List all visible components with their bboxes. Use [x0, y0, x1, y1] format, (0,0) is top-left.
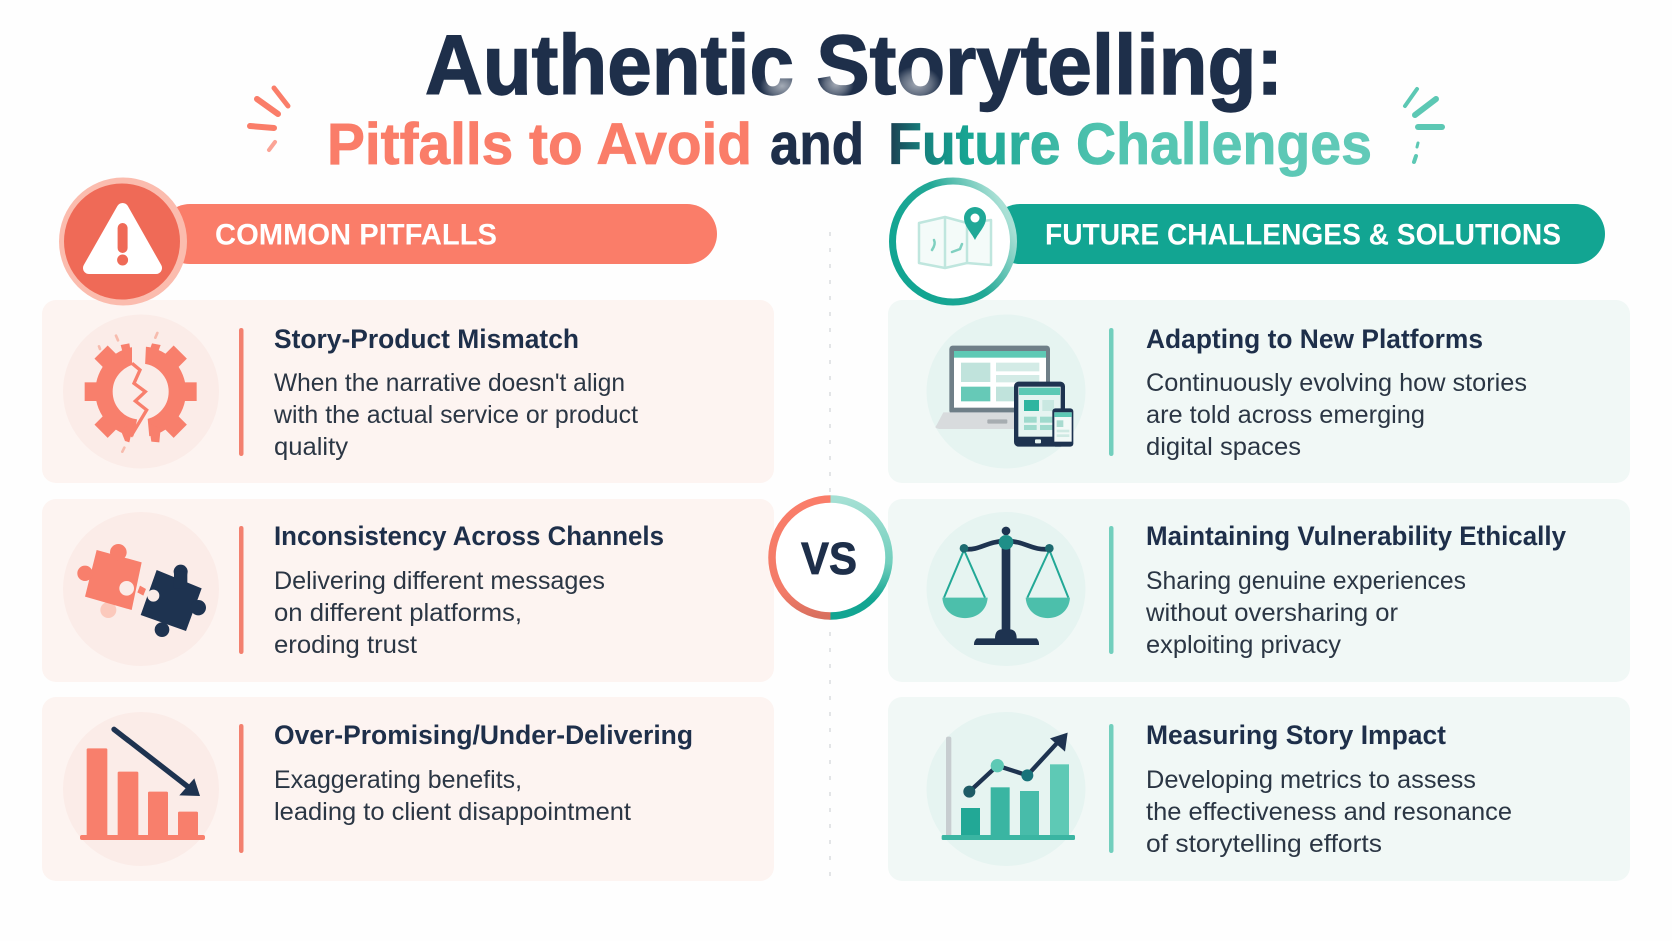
panel: inconsistency across channels: on different platforms, [274, 599, 522, 627]
panel: measuring story impact [888, 697, 1630, 881]
panel: maintaining vulnerability ethically: exploiting privacy [1146, 631, 1342, 659]
icon: declining bar chart [80, 729, 205, 840]
icon: teal sparks [1405, 89, 1442, 162]
icon: coral sparks [250, 88, 288, 150]
subtitle [327, 112, 1372, 177]
icon: map with pin [892, 181, 1014, 302]
banner: future challenges and solutions: FUTURE CHALLENGES & SOLUTIONS [1045, 218, 1561, 252]
title: Authentic Storytelling: [425, 18, 1283, 112]
panel: over-promising under-delivering: leading to client disappointment [274, 798, 631, 826]
icon: warning triangle [59, 178, 187, 306]
panel: inconsistency across channels [42, 499, 774, 682]
panel: measuring story impact: Measuring Story Impact [1146, 720, 1446, 750]
panel: over-promising under-delivering: Exaggerating benefits, [274, 766, 522, 794]
panel: inconsistency across channels: eroding trust [274, 631, 417, 659]
panel: inconsistency across channels: Inconsistency Across Channels [274, 521, 664, 551]
panel: over-promising under-delivering [42, 697, 774, 881]
panel: story-product mismatch: quality [274, 433, 349, 461]
vs badge [768, 496, 892, 620]
panel: maintaining vulnerability ethically [888, 499, 1630, 682]
icon: mismatched puzzle pieces [77, 544, 206, 637]
panel: inconsistency across channels: Delivering different messages [274, 567, 605, 595]
panel: story-product mismatch: with the actual service or product [273, 401, 638, 429]
banner: common pitfalls [59, 178, 717, 306]
panel: measuring story impact: of storytelling efforts [1146, 830, 1382, 858]
panel: measuring story impact: the effectiveness and resonance [1146, 798, 1512, 826]
banner: common pitfalls: COMMON PITFALLS [215, 218, 497, 252]
panel: measuring story impact: Developing metrics to assess [1146, 766, 1476, 794]
panel: maintaining vulnerability ethically: Maintaining Vulnerability Ethically [1146, 521, 1566, 551]
panel: maintaining vulnerability ethically: Sharing genuine experiences [1146, 567, 1466, 595]
panel: adapting to new platforms [888, 300, 1630, 483]
panel: adapting to new platforms: are told across emerging [1146, 401, 1425, 429]
banner: future challenges and solutions [892, 181, 1605, 302]
subtitle: Future Challenges [888, 112, 1372, 177]
vs badge: VS [801, 533, 857, 584]
panel: adapting to new platforms: digital spaces [1146, 433, 1301, 461]
icon: balance scales [942, 527, 1070, 645]
panel: over-promising under-delivering: Over-Promising/Under-Delivering [274, 720, 693, 750]
panel: adapting to new platforms: Adapting to New Platforms [1146, 324, 1483, 354]
subtitle: Pitfalls to Avoid [327, 112, 752, 177]
panel: story-product mismatch [42, 300, 774, 483]
icon: broken gear [85, 332, 197, 452]
panel: story-product mismatch: When the narrative doesn't align [274, 369, 625, 397]
subtitle: and [770, 112, 864, 177]
panel: story-product mismatch: Story-Product Mismatch [274, 324, 579, 354]
icon: laptop tablet and phone [935, 346, 1073, 447]
panel: maintaining vulnerability ethically: without oversharing or [1145, 599, 1398, 627]
icon: rising bar chart with trend line [942, 733, 1075, 840]
panel: adapting to new platforms: Continuously evolving how stories [1146, 369, 1527, 397]
